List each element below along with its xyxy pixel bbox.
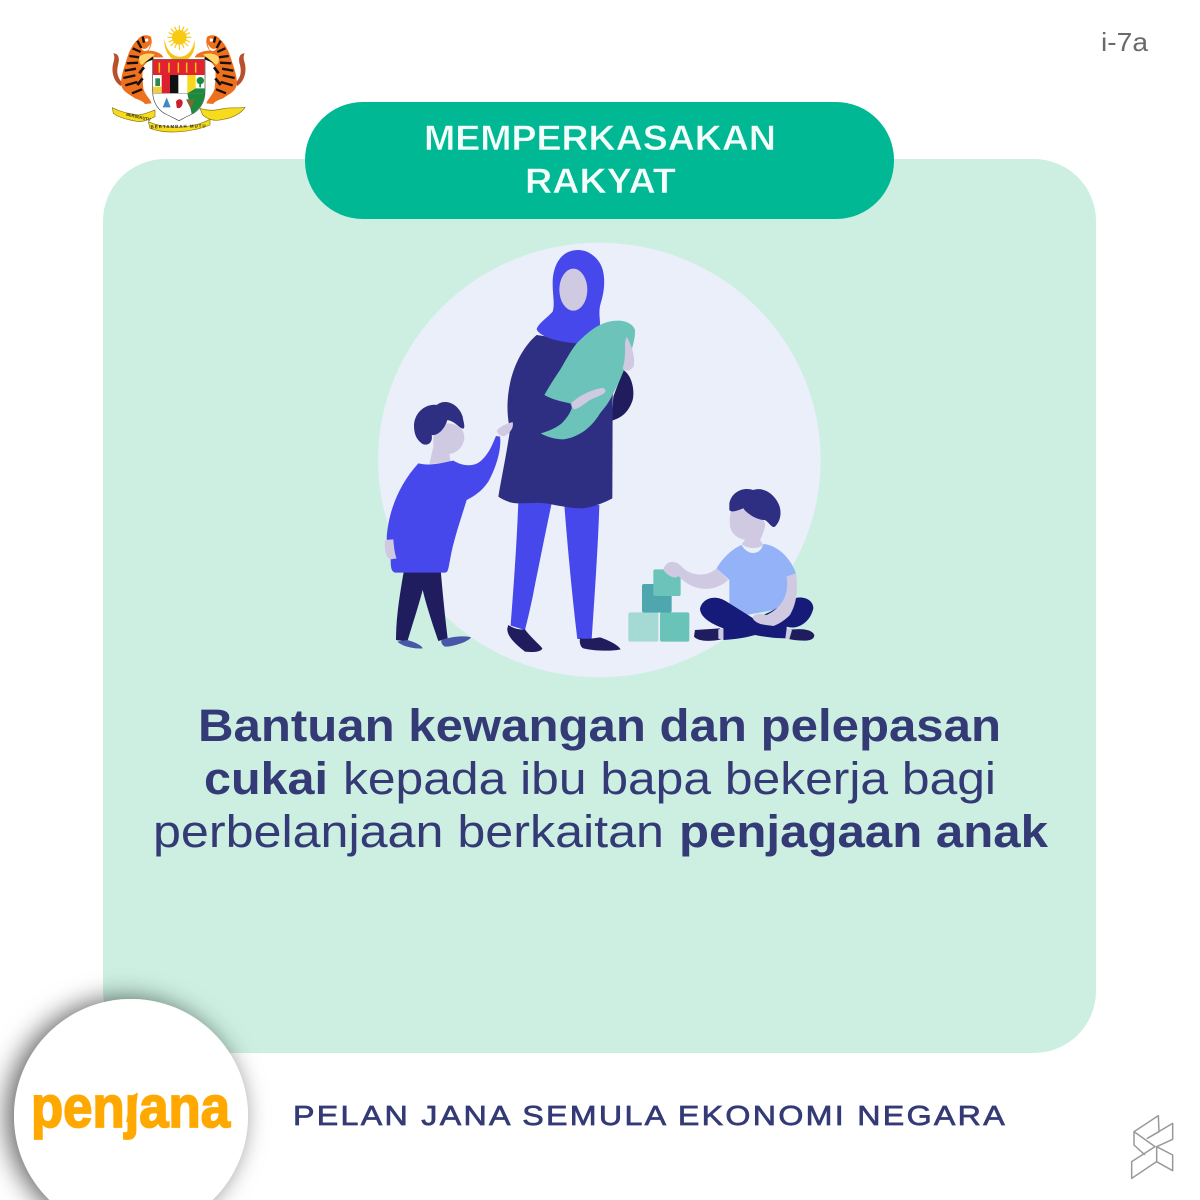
- icon: shield: [153, 59, 205, 121]
- panel: mint background: [103, 159, 1096, 1053]
- main message text: kepada ibu bapa bekerja bagi: [343, 753, 996, 804]
- icon: scroll with motto: [112, 107, 245, 132]
- icon: left tiger: [112, 35, 163, 104]
- icon: coat of arms: [112, 25, 246, 132]
- figure: standing boy: [385, 402, 513, 649]
- penjana logo badge: penjana: [31, 1075, 231, 1140]
- figure: mother holding baby: [498, 250, 635, 652]
- main message text: [153, 700, 1049, 857]
- illustration background circle: [378, 243, 821, 677]
- icon: sun and crescent: [164, 25, 195, 62]
- illustration: mother and children: [378, 243, 821, 677]
- heading pill: MEMPERKASAKAN: [424, 119, 776, 158]
- icon: toy blocks: [628, 569, 689, 642]
- heading pill: [305, 102, 894, 219]
- code label i-7a: i-7a: [1101, 27, 1149, 57]
- heading pill: RAKYAT: [525, 162, 676, 201]
- icon: scroll with motto: BERTAMBAH MUTU: [151, 123, 206, 129]
- icon: scroll with motto: BERSEKUTU: [126, 112, 151, 122]
- footer tagline: PELAN JANA SEMULA EKONOMI NEGARA: [293, 1100, 1007, 1131]
- main message text: perbelanjaan berkaitan: [153, 806, 664, 857]
- main message text: Bantuan kewangan dan pelepasan: [198, 700, 1001, 751]
- penjana logo badge: [14, 999, 248, 1200]
- icon: publisher logo: [1132, 1116, 1173, 1178]
- main message text: penjagaan anak: [679, 806, 1049, 857]
- icon: right tiger: [195, 35, 246, 104]
- main message text: cukai: [204, 753, 328, 804]
- figure: sitting boy: [663, 489, 814, 641]
